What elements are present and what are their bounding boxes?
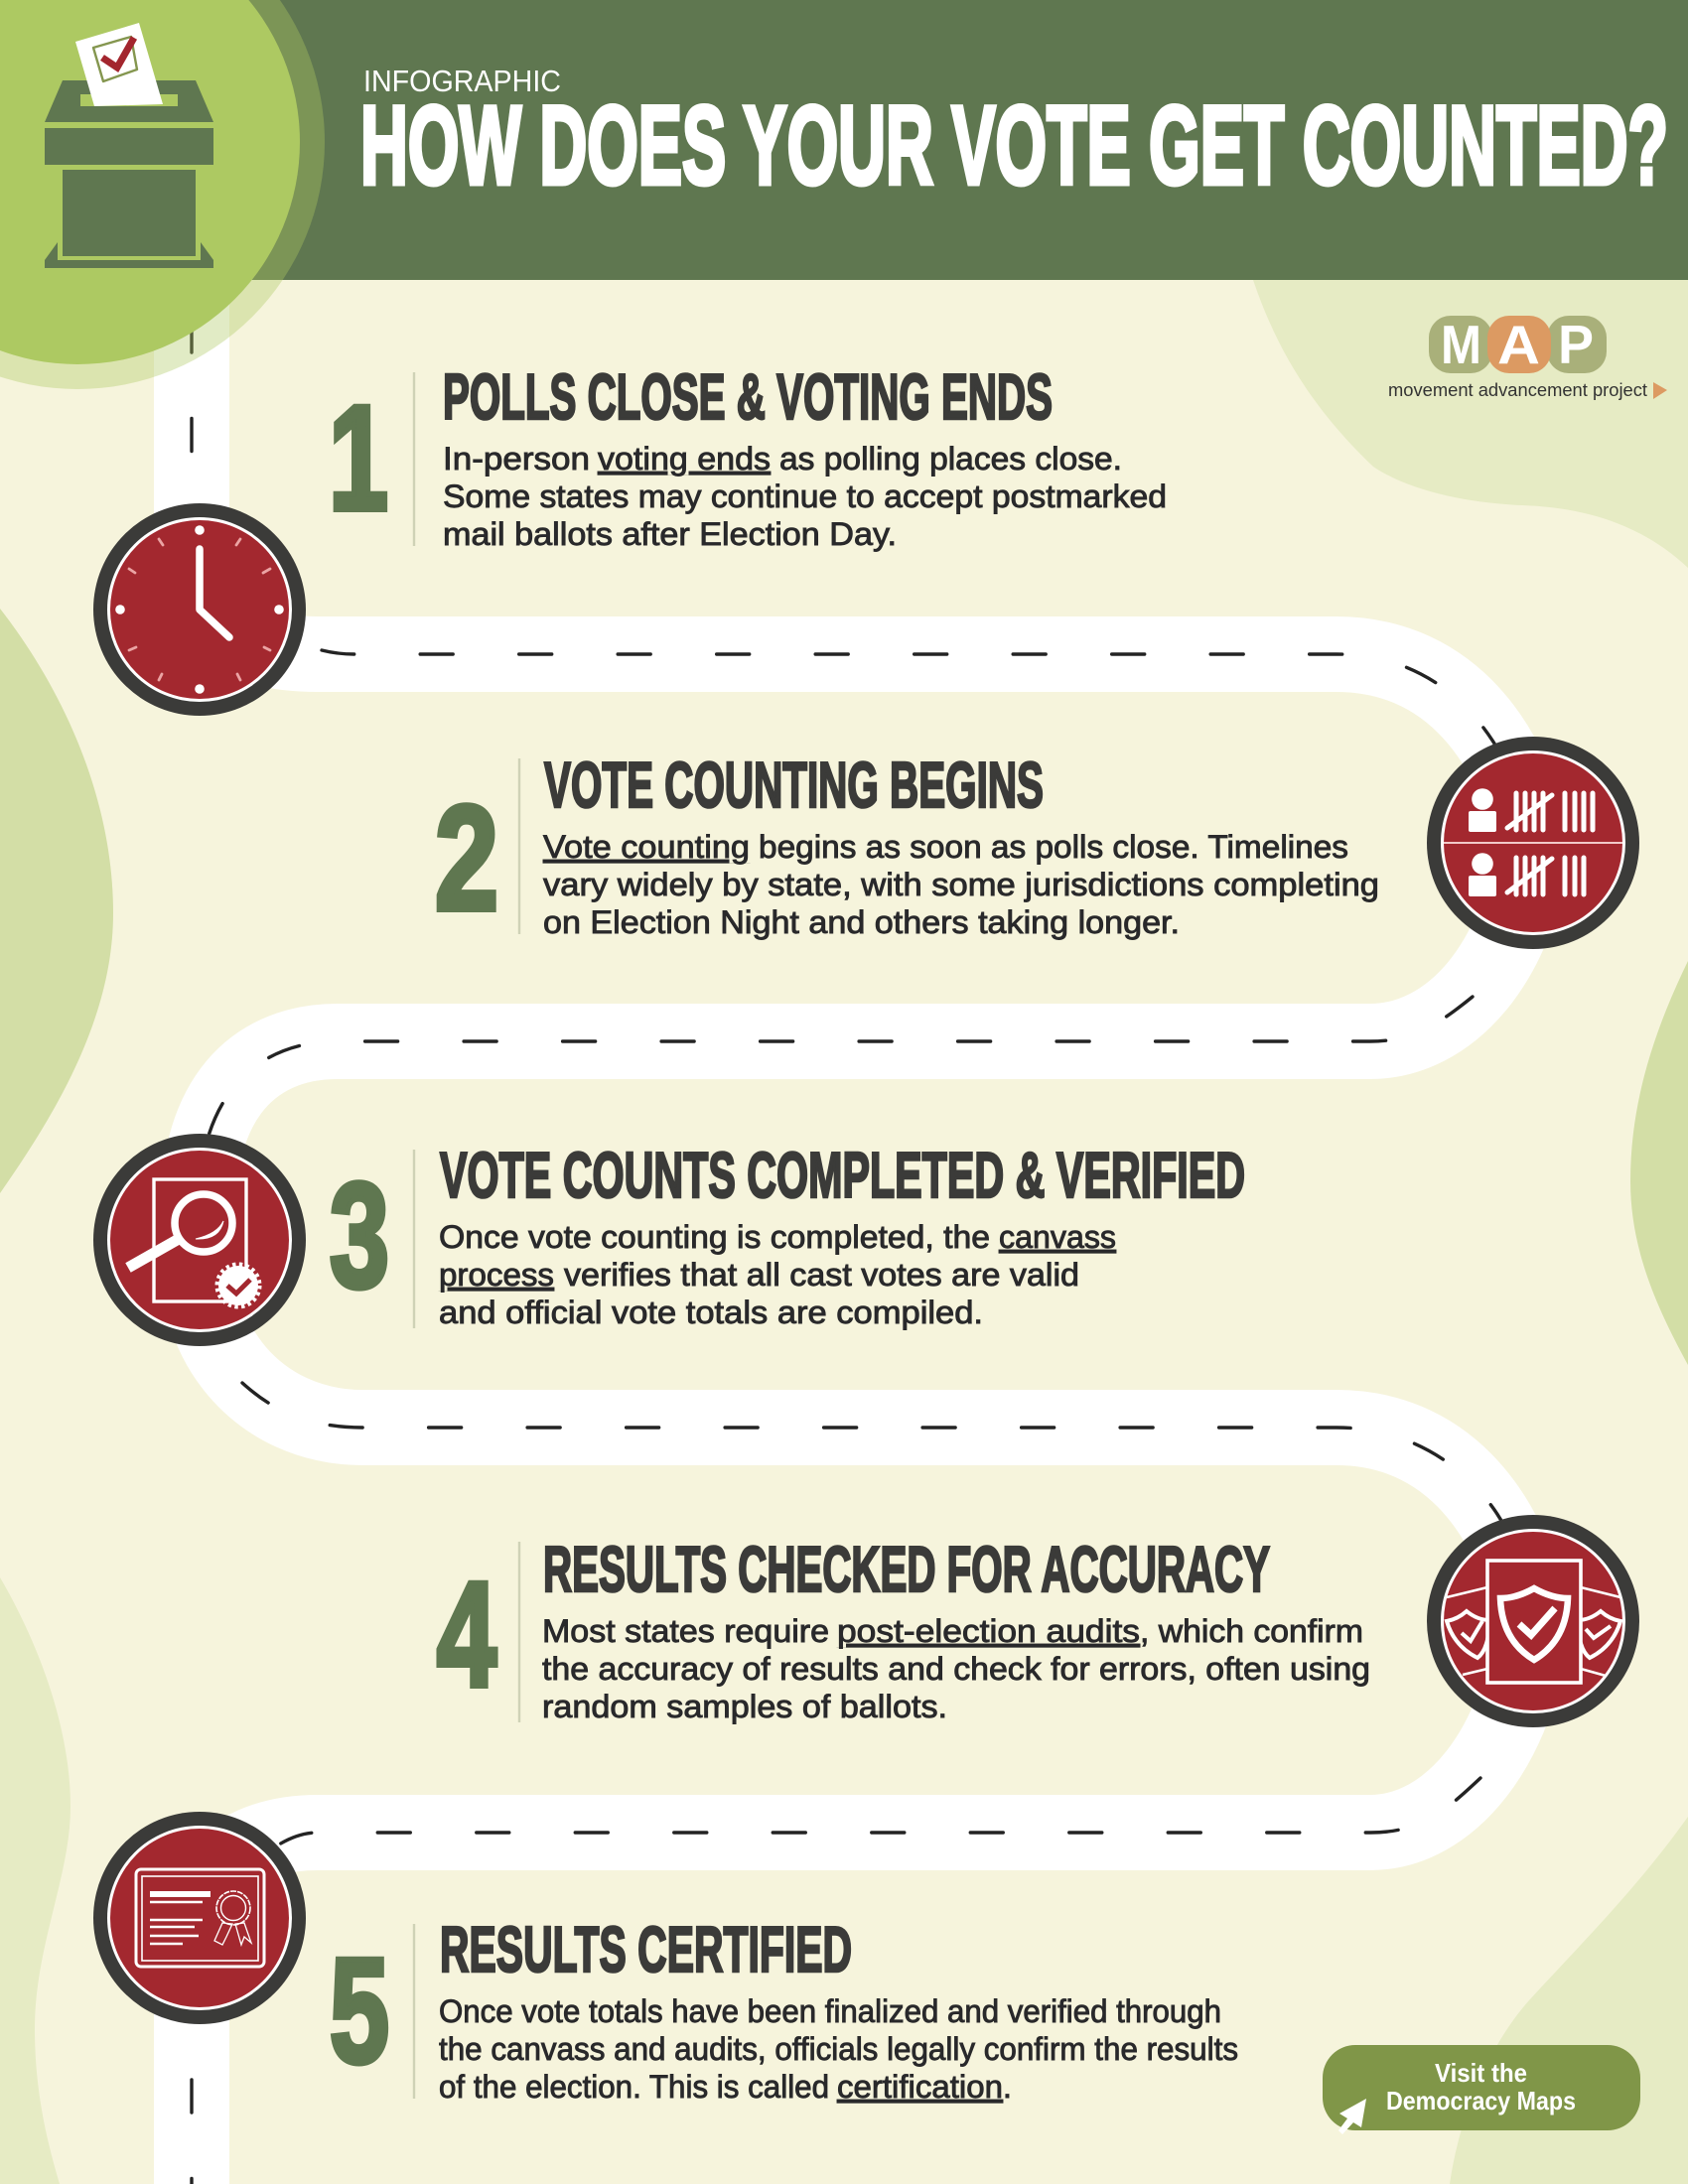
body: results checked: post-election audits bbox=[837, 1613, 1140, 1649]
body: results checked bbox=[542, 1613, 1370, 1724]
icon: ballot box bbox=[45, 23, 213, 268]
body: polls close: voting ends bbox=[598, 441, 771, 477]
body: counts completed: and official vote totals are compiled. bbox=[439, 1295, 983, 1330]
header band bbox=[0, 0, 1688, 280]
body: polls close: mail ballots after Election Day. bbox=[443, 516, 897, 552]
heading: counts completed: VOTE COUNTS COMPLETED & VERIFIED bbox=[440, 1139, 1245, 1211]
MAP logo: P bbox=[1558, 314, 1594, 375]
body: vote counting: begins as soon as polls close. Timelines bbox=[759, 829, 1348, 865]
number 2: 2 bbox=[435, 774, 498, 941]
body: results certified bbox=[439, 1993, 1238, 2105]
header circle badge bbox=[0, 0, 325, 389]
body: results certified: the canvass and audits, officials legally confirm the results bbox=[439, 2031, 1238, 2067]
body: polls close: as polling places close. bbox=[779, 441, 1122, 477]
MAP logo: movement advancement project bbox=[1388, 380, 1647, 400]
number 5: 5 bbox=[330, 1927, 389, 2094]
body: results checked: Most states require bbox=[542, 1613, 829, 1649]
step 3 bbox=[330, 1139, 1245, 1330]
MAP logo bbox=[1388, 314, 1667, 400]
body: results checked: , which confirm bbox=[1140, 1613, 1363, 1649]
icon: audit shields bbox=[1427, 1515, 1639, 1727]
step 4 bbox=[437, 1533, 1370, 1724]
body: polls close bbox=[443, 441, 1167, 552]
body: polls close: Some states may continue to accept postmarked bbox=[443, 478, 1167, 514]
header text: INFOGRAPHIC bbox=[363, 64, 561, 98]
body: counts completed: process bbox=[439, 1257, 554, 1293]
winding road bbox=[192, 248, 1533, 2184]
body: results certified: Once vote totals have been finalized and verified through bbox=[439, 1993, 1221, 2029]
body: polls close: In-person bbox=[443, 441, 590, 477]
body: vote counting: Vote counting bbox=[543, 829, 750, 865]
button: visit the democracy maps bbox=[1323, 2045, 1640, 2134]
heading: results certified: RESULTS CERTIFIED bbox=[440, 1913, 852, 1985]
MAP logo: A bbox=[1497, 314, 1540, 375]
number 3: 3 bbox=[330, 1152, 389, 1318]
heading: polls close: POLLS CLOSE & VOTING ENDS bbox=[443, 360, 1053, 433]
body: counts completed: verifies that all cast votes are valid bbox=[564, 1257, 1079, 1293]
number 1: 1 bbox=[329, 374, 388, 541]
number 4: 4 bbox=[437, 1551, 496, 1717]
body: vote counting: on Election Night and others taking longer. bbox=[543, 904, 1180, 940]
body: counts completed bbox=[439, 1219, 1116, 1330]
icon: certificate bbox=[93, 1812, 306, 2024]
icon: cursor arrow bbox=[1338, 2099, 1366, 2134]
body: results checked: the accuracy of results and check for errors, often using bbox=[542, 1651, 1370, 1687]
body: results checked: random samples of ballots. bbox=[542, 1689, 947, 1724]
step 2 bbox=[435, 749, 1379, 941]
body: counts completed: canvass bbox=[999, 1219, 1116, 1255]
icon: magnifier over document bbox=[93, 1134, 306, 1346]
button: visit the democracy maps: Democracy Maps bbox=[1386, 2086, 1576, 2116]
step 1 bbox=[329, 360, 1167, 552]
body: results certified: certification bbox=[837, 2069, 1003, 2105]
body: results certified: of the election. This is called bbox=[439, 2069, 829, 2105]
body: results certified: . bbox=[1003, 2069, 1012, 2105]
heading: vote counting: VOTE COUNTING BEGINS bbox=[544, 749, 1044, 821]
MAP logo: M bbox=[1441, 314, 1481, 375]
step 5 bbox=[330, 1913, 1238, 2105]
body: counts completed: Once vote counting is completed, the bbox=[439, 1219, 990, 1255]
body: vote counting bbox=[543, 829, 1379, 940]
body: vote counting: vary widely by state, with some jurisdictions completing bbox=[543, 867, 1379, 902]
heading: results checked: RESULTS CHECKED FOR ACCURACY bbox=[543, 1533, 1270, 1605]
icon: clock bbox=[93, 503, 306, 716]
button: visit the democracy maps: Visit the bbox=[1435, 2058, 1527, 2088]
icon: tally marks bbox=[1427, 737, 1639, 949]
